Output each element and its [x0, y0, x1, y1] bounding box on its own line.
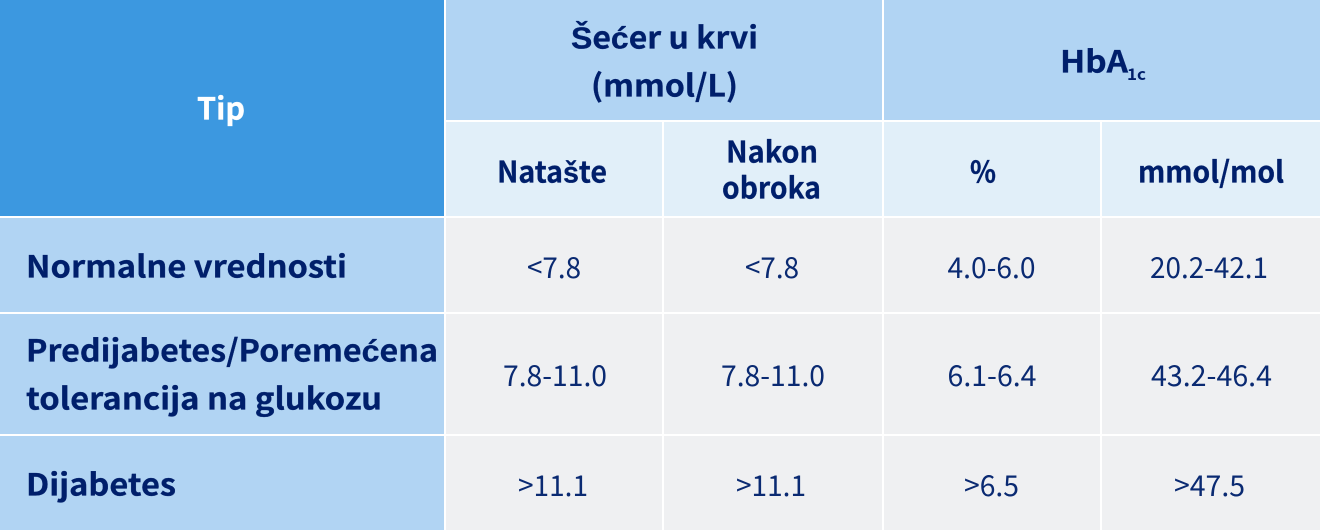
subheader: Nakon obroka: Nakon: [726, 130, 818, 172]
header cell: HbA1c: HbA: [1060, 38, 1128, 82]
row label: Predijabetes: [0, 314, 444, 434]
subheader: percent: [884, 122, 1100, 216]
value cell: normal mmol/mol: 20.2-42.1: [1150, 245, 1268, 287]
value cell: prediabetes after meal: 7.8-11.0: [721, 353, 825, 395]
row label: Predijabetes: Predijabetes/Poreme ćena: [26, 326, 438, 370]
subheader: Natašte: Natašte: [497, 150, 607, 192]
subheader: Nakon obroka: [664, 122, 882, 216]
row label: Predijabetes: tolerancija na glukozu: [26, 374, 382, 418]
row label: Dijabetes: [0, 436, 444, 530]
value cell: prediabetes percent: 6.1-6.4: [948, 353, 1036, 395]
value cell: diabetes percent: [884, 436, 1100, 530]
value cell: normal fasting: <7.8: [527, 245, 581, 287]
value cell: prediabetes fasting: 7.8-11.0: [503, 353, 607, 395]
row label: Normalne vrednosti: Normalne vrednosti: [26, 242, 347, 286]
subheader: mmol/mol: mmol/mol: [1138, 150, 1284, 192]
header cell: HbA1c: [884, 0, 1320, 120]
header cell: Tip: Tip: [197, 84, 245, 128]
header cell: Tip: [0, 0, 444, 216]
value cell: normal after meal: <7.8: [745, 245, 799, 287]
value cell: prediabetes after meal: [664, 314, 882, 434]
value cell: normal percent: 4.0-6.0: [948, 245, 1036, 287]
subheader: percent: %: [970, 150, 996, 192]
value cell: diabetes mmol/mol: [1102, 436, 1320, 530]
value cell: prediabetes percent: [884, 314, 1100, 434]
value cell: diabetes mmol/mol: >47.5: [1174, 463, 1245, 505]
value cell: normal mmol/mol: [1102, 218, 1320, 312]
row label: Normalne vrednosti: [0, 218, 444, 312]
value cell: diabetes fasting: >11.1: [518, 463, 588, 505]
subheader: Nakon obroka: obroka: [722, 166, 821, 208]
subheader: mmol/mol: [1102, 122, 1320, 216]
row label: Dijabetes: Dijabetes: [26, 460, 176, 504]
value cell: normal after meal: [664, 218, 882, 312]
value cell: diabetes fasting: [446, 436, 662, 530]
value cell: prediabetes mmol/mol: [1102, 314, 1320, 434]
value cell: diabetes after meal: [664, 436, 882, 530]
value cell: prediabetes fasting: [446, 314, 662, 434]
value cell: normal percent: [884, 218, 1100, 312]
header cell: blood sugar: (mmol/L): [591, 62, 738, 106]
value cell: normal fasting: [446, 218, 662, 312]
value cell: diabetes after meal: >11.1: [736, 463, 806, 505]
header cell: blood sugar: Šećer u krvi: [571, 14, 758, 58]
header cell: blood sugar: [446, 0, 882, 120]
value cell: prediabetes mmol/mol: 43.2-46.4: [1151, 353, 1272, 395]
value cell: diabetes percent: >6.5: [964, 463, 1019, 505]
header cell: HbA1c: 1c: [1127, 61, 1146, 85]
subheader: Natašte: [446, 122, 662, 216]
